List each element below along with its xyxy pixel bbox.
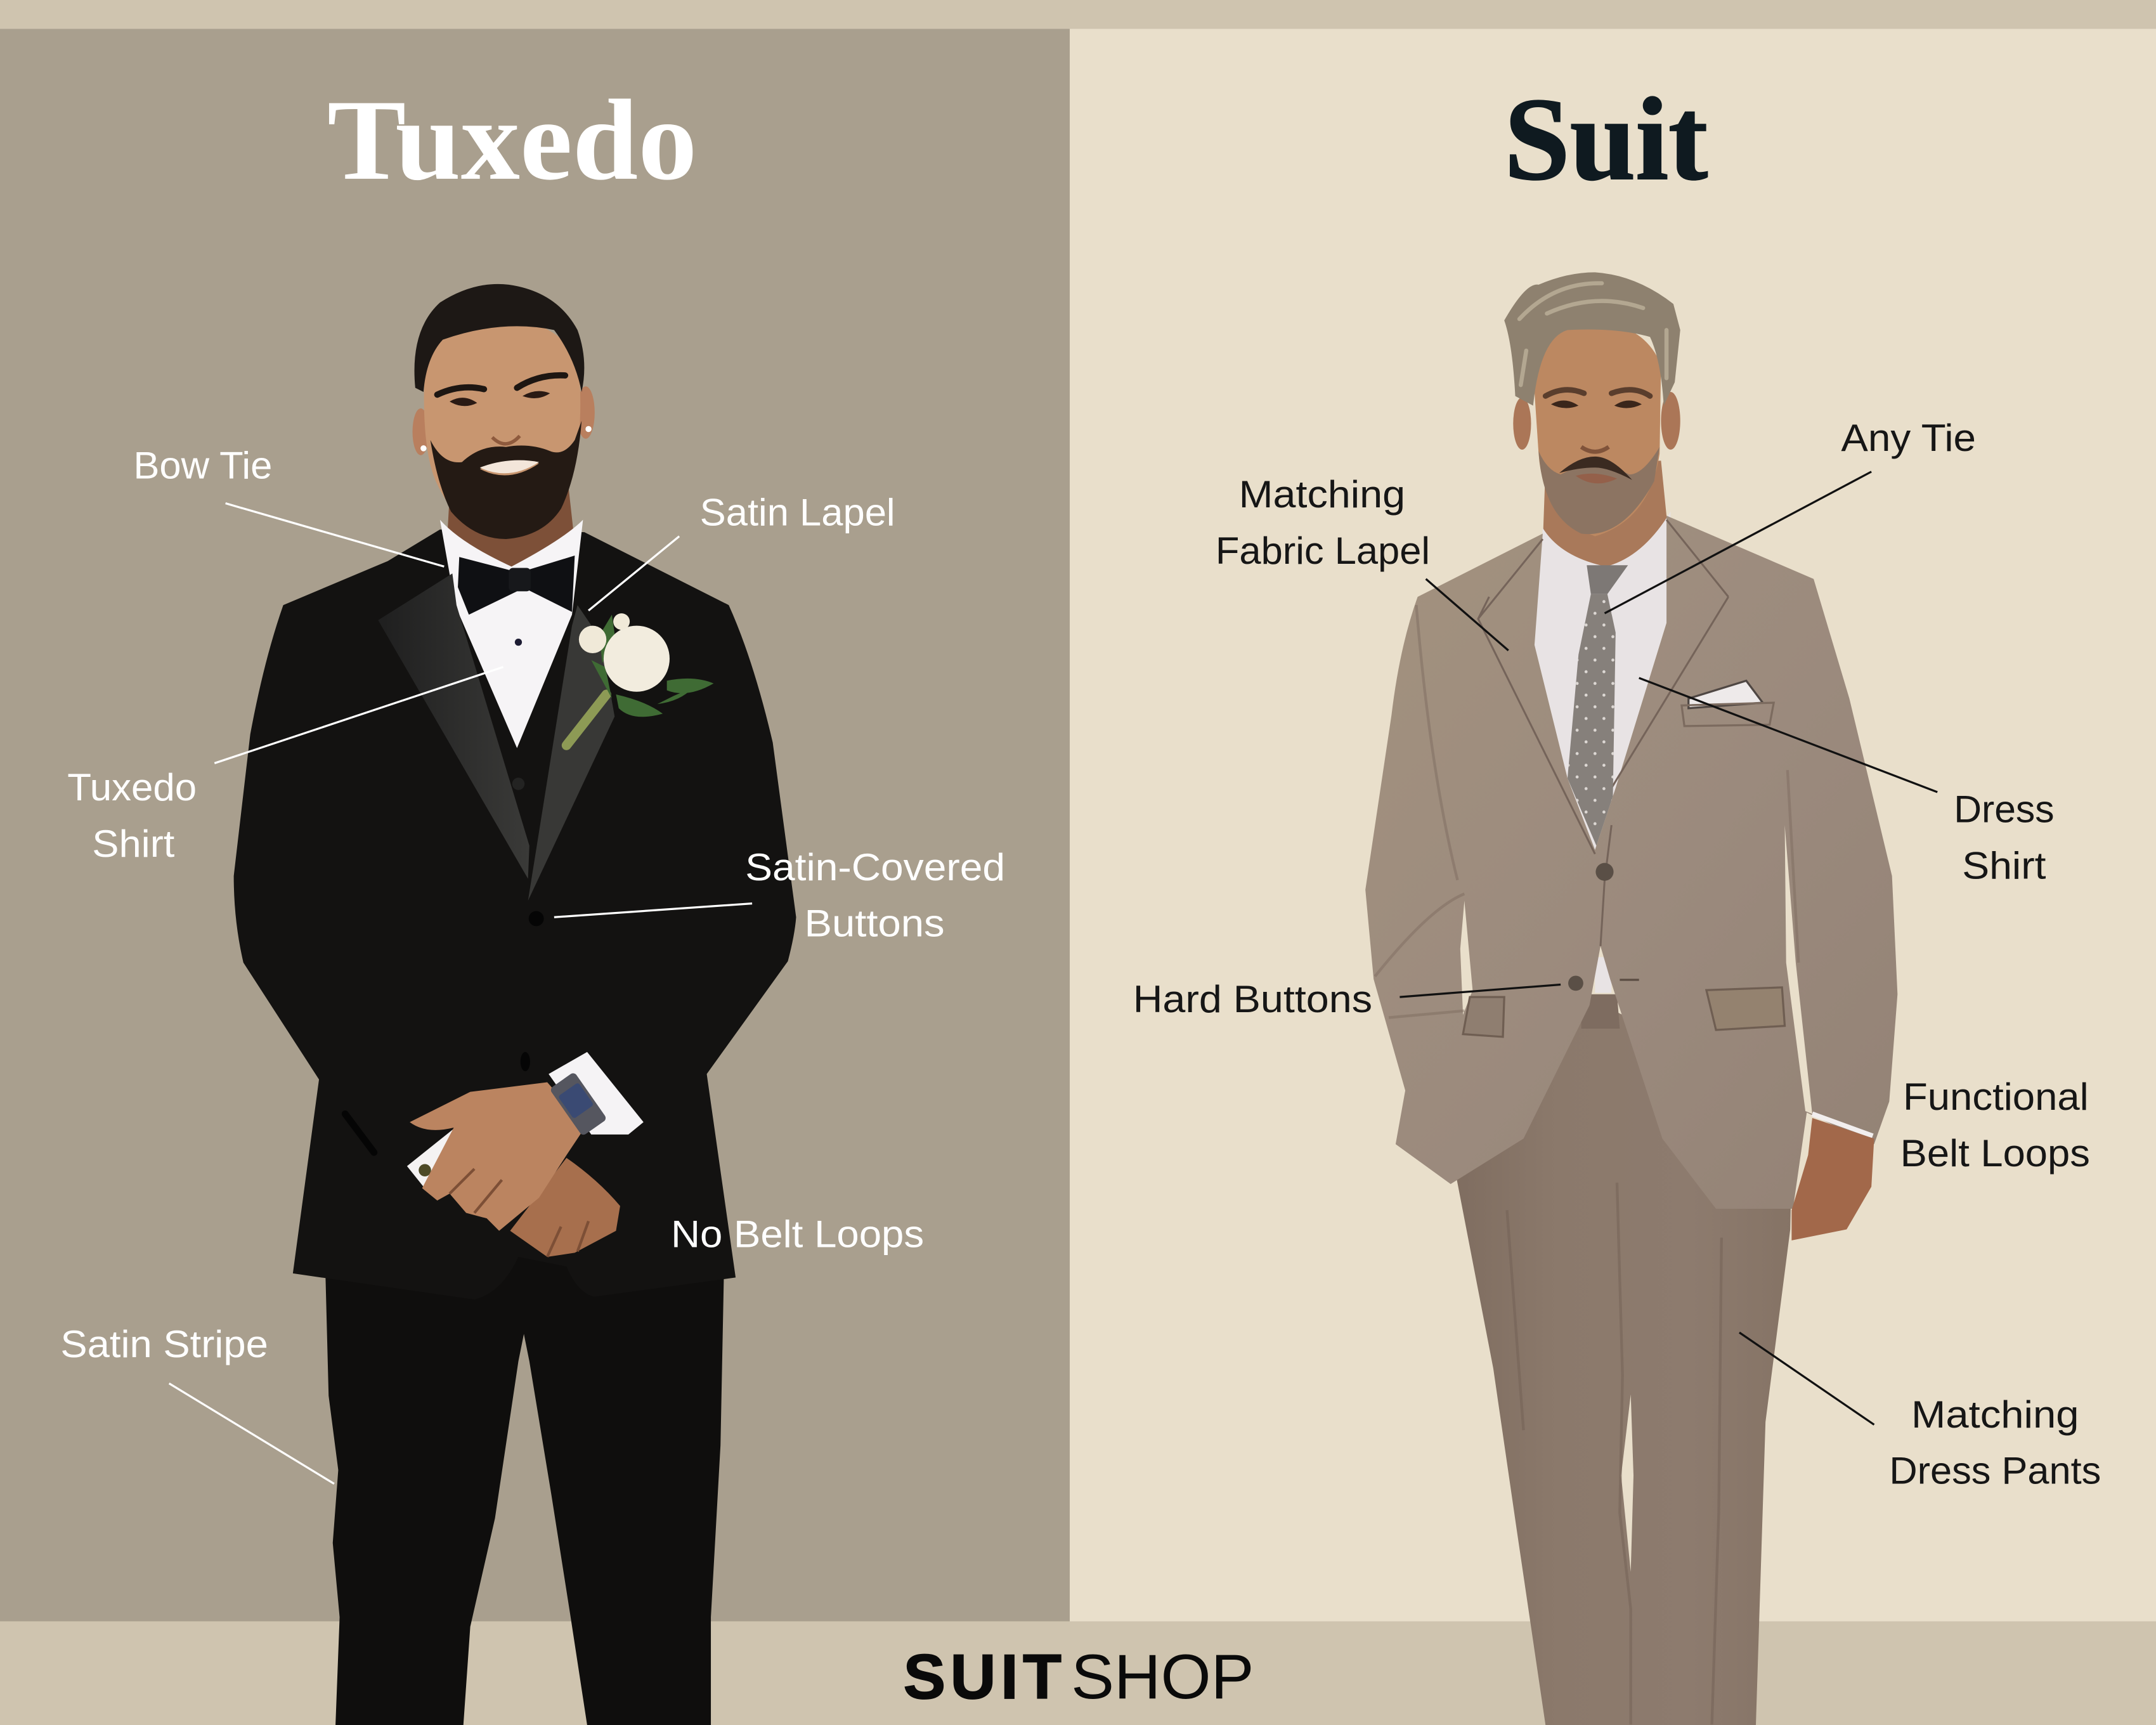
panel: tuxedo background	[0, 29, 1070, 1622]
footer strip	[0, 1622, 2156, 1725]
lower jacket button	[521, 1052, 530, 1071]
hair highlights	[1519, 283, 1666, 385]
beard	[1538, 447, 1659, 534]
upper hand	[410, 1083, 586, 1231]
label: Satin Stripe	[60, 1322, 334, 1484]
label: Dress Shirt: Shirt	[1962, 844, 2046, 887]
shirt cuff	[1812, 1114, 1873, 1136]
heading: Tuxedo: Tuxedo	[327, 77, 697, 204]
label: Functional Belt Loops: Belt Loops	[1900, 1131, 2090, 1175]
tie knot	[1587, 565, 1628, 594]
dress shirt	[1535, 512, 1671, 850]
suit trousers	[1455, 994, 1793, 1725]
logo: SuitShop: SHOP	[1071, 1642, 1254, 1712]
eyes	[1551, 400, 1642, 408]
label: Tuxedo Shirt: Shirt	[92, 822, 175, 865]
eyebrows	[438, 375, 565, 394]
ears	[1513, 392, 1680, 450]
face	[1533, 323, 1661, 537]
breast pocket	[1682, 703, 1774, 726]
bow tie	[458, 556, 575, 615]
nose	[492, 436, 520, 444]
tuxedo trousers	[325, 1238, 725, 1725]
sleeve gap left	[1460, 901, 1472, 1015]
label: Any Tie	[1604, 416, 1976, 613]
label: Matching Dress Pants	[1739, 1332, 2101, 1492]
label: Any Tie: Any Tie	[1841, 416, 1976, 459]
left shirt cuff	[407, 1122, 467, 1194]
lips	[1576, 474, 1617, 483]
label: Dress Shirt	[1639, 678, 2055, 887]
tie dots	[1568, 594, 1616, 846]
neck	[447, 481, 575, 585]
label: Matching Dress Pants: Dress Pants	[1889, 1449, 2101, 1492]
cufflink	[419, 1164, 431, 1176]
jacket buttons	[1568, 863, 1614, 991]
moustache	[1559, 457, 1632, 480]
vest buttons and shirt stud	[512, 639, 524, 790]
heading: Suit: Suit	[1504, 74, 1708, 205]
label: Bow Tie: Bow Tie	[133, 444, 272, 487]
tuxedo jacket	[234, 530, 796, 1299]
smile	[480, 460, 539, 473]
hand	[1791, 1118, 1874, 1240]
hip pocket flap left	[1463, 997, 1504, 1037]
face	[424, 319, 580, 537]
stem	[566, 694, 606, 745]
label: Satin Lapel	[588, 490, 895, 611]
tie blade	[1568, 594, 1616, 846]
figure: man in tuxedo	[234, 284, 796, 1725]
lapel seams	[1478, 520, 1729, 946]
tuxedo shirt	[440, 520, 583, 748]
label: Satin Lapel: Satin Lapel	[700, 490, 895, 533]
boutonniere	[566, 613, 713, 745]
trouser leg gap	[1621, 1395, 1633, 1572]
white flowers	[604, 626, 670, 692]
background: top strip	[0, 0, 2156, 29]
panel: suit background	[1070, 29, 2156, 1622]
neck	[1543, 460, 1668, 585]
label: Hard Buttons	[1133, 977, 1561, 1020]
watch	[549, 1072, 607, 1136]
callouts: tuxedo	[60, 444, 1005, 1484]
beard	[431, 421, 581, 539]
label: Bow Tie	[133, 444, 444, 566]
leaves	[591, 615, 713, 717]
left satin lapel	[378, 573, 529, 879]
label: Satin-Covered Buttons: Satin-Covered	[745, 845, 1005, 889]
figure: man in suit	[1365, 272, 1897, 1725]
jacket button	[529, 911, 544, 926]
logo: SuitShop	[904, 1642, 1254, 1712]
trouser waistband	[1581, 994, 1620, 1029]
label: Satin Stripe: Satin Stripe	[60, 1322, 268, 1365]
pocket square	[1689, 680, 1763, 708]
label: Matching Fabric Lapel: Fabric Lapel	[1216, 529, 1430, 572]
sleeve buttons	[345, 1114, 374, 1152]
right satin lapel	[528, 605, 614, 901]
label: Satin-Covered Buttons: Buttons	[804, 902, 945, 945]
sleeve gap right	[1785, 825, 1812, 1114]
label: Tuxedo Shirt	[67, 667, 503, 865]
callouts: suit	[1133, 416, 2101, 1492]
waist shirt sliver	[1595, 957, 1611, 993]
label: Matching Dress Pants: Matching	[1911, 1393, 2079, 1436]
label: Dress Shirt: Dress	[1954, 788, 2055, 831]
eyes	[450, 391, 550, 406]
trouser inner shadow	[1507, 1183, 1722, 1724]
label: Matching Fabric Lapel: Matching	[1239, 472, 1405, 516]
suit jacket	[1365, 516, 1897, 1209]
right shirt cuff	[549, 1052, 644, 1135]
hip pocket flap right	[1706, 987, 1785, 1030]
label: No Belt Loops: No Belt Loops	[671, 1213, 924, 1256]
ears	[413, 386, 595, 455]
label: Tuxedo Shirt: Tuxedo	[67, 765, 197, 809]
label: Satin-Covered Buttons	[554, 845, 1005, 945]
hair	[1504, 272, 1680, 406]
logo: SuitShop: SUIT	[904, 1642, 1062, 1712]
label: Functional Belt Loops: Functional	[1903, 1075, 2089, 1118]
label: Matching Fabric Lapel	[1216, 472, 1509, 651]
nose	[1581, 447, 1609, 452]
lower hand	[510, 1158, 620, 1257]
sleeve folds	[1375, 605, 1798, 1018]
label: Functional Belt Loops	[1900, 1075, 2090, 1175]
buttonhole	[1620, 979, 1639, 980]
eyebrows	[1545, 390, 1650, 396]
hair	[415, 284, 584, 392]
finger creases	[450, 1169, 588, 1257]
label: Hard Buttons: Hard Buttons	[1133, 977, 1372, 1020]
